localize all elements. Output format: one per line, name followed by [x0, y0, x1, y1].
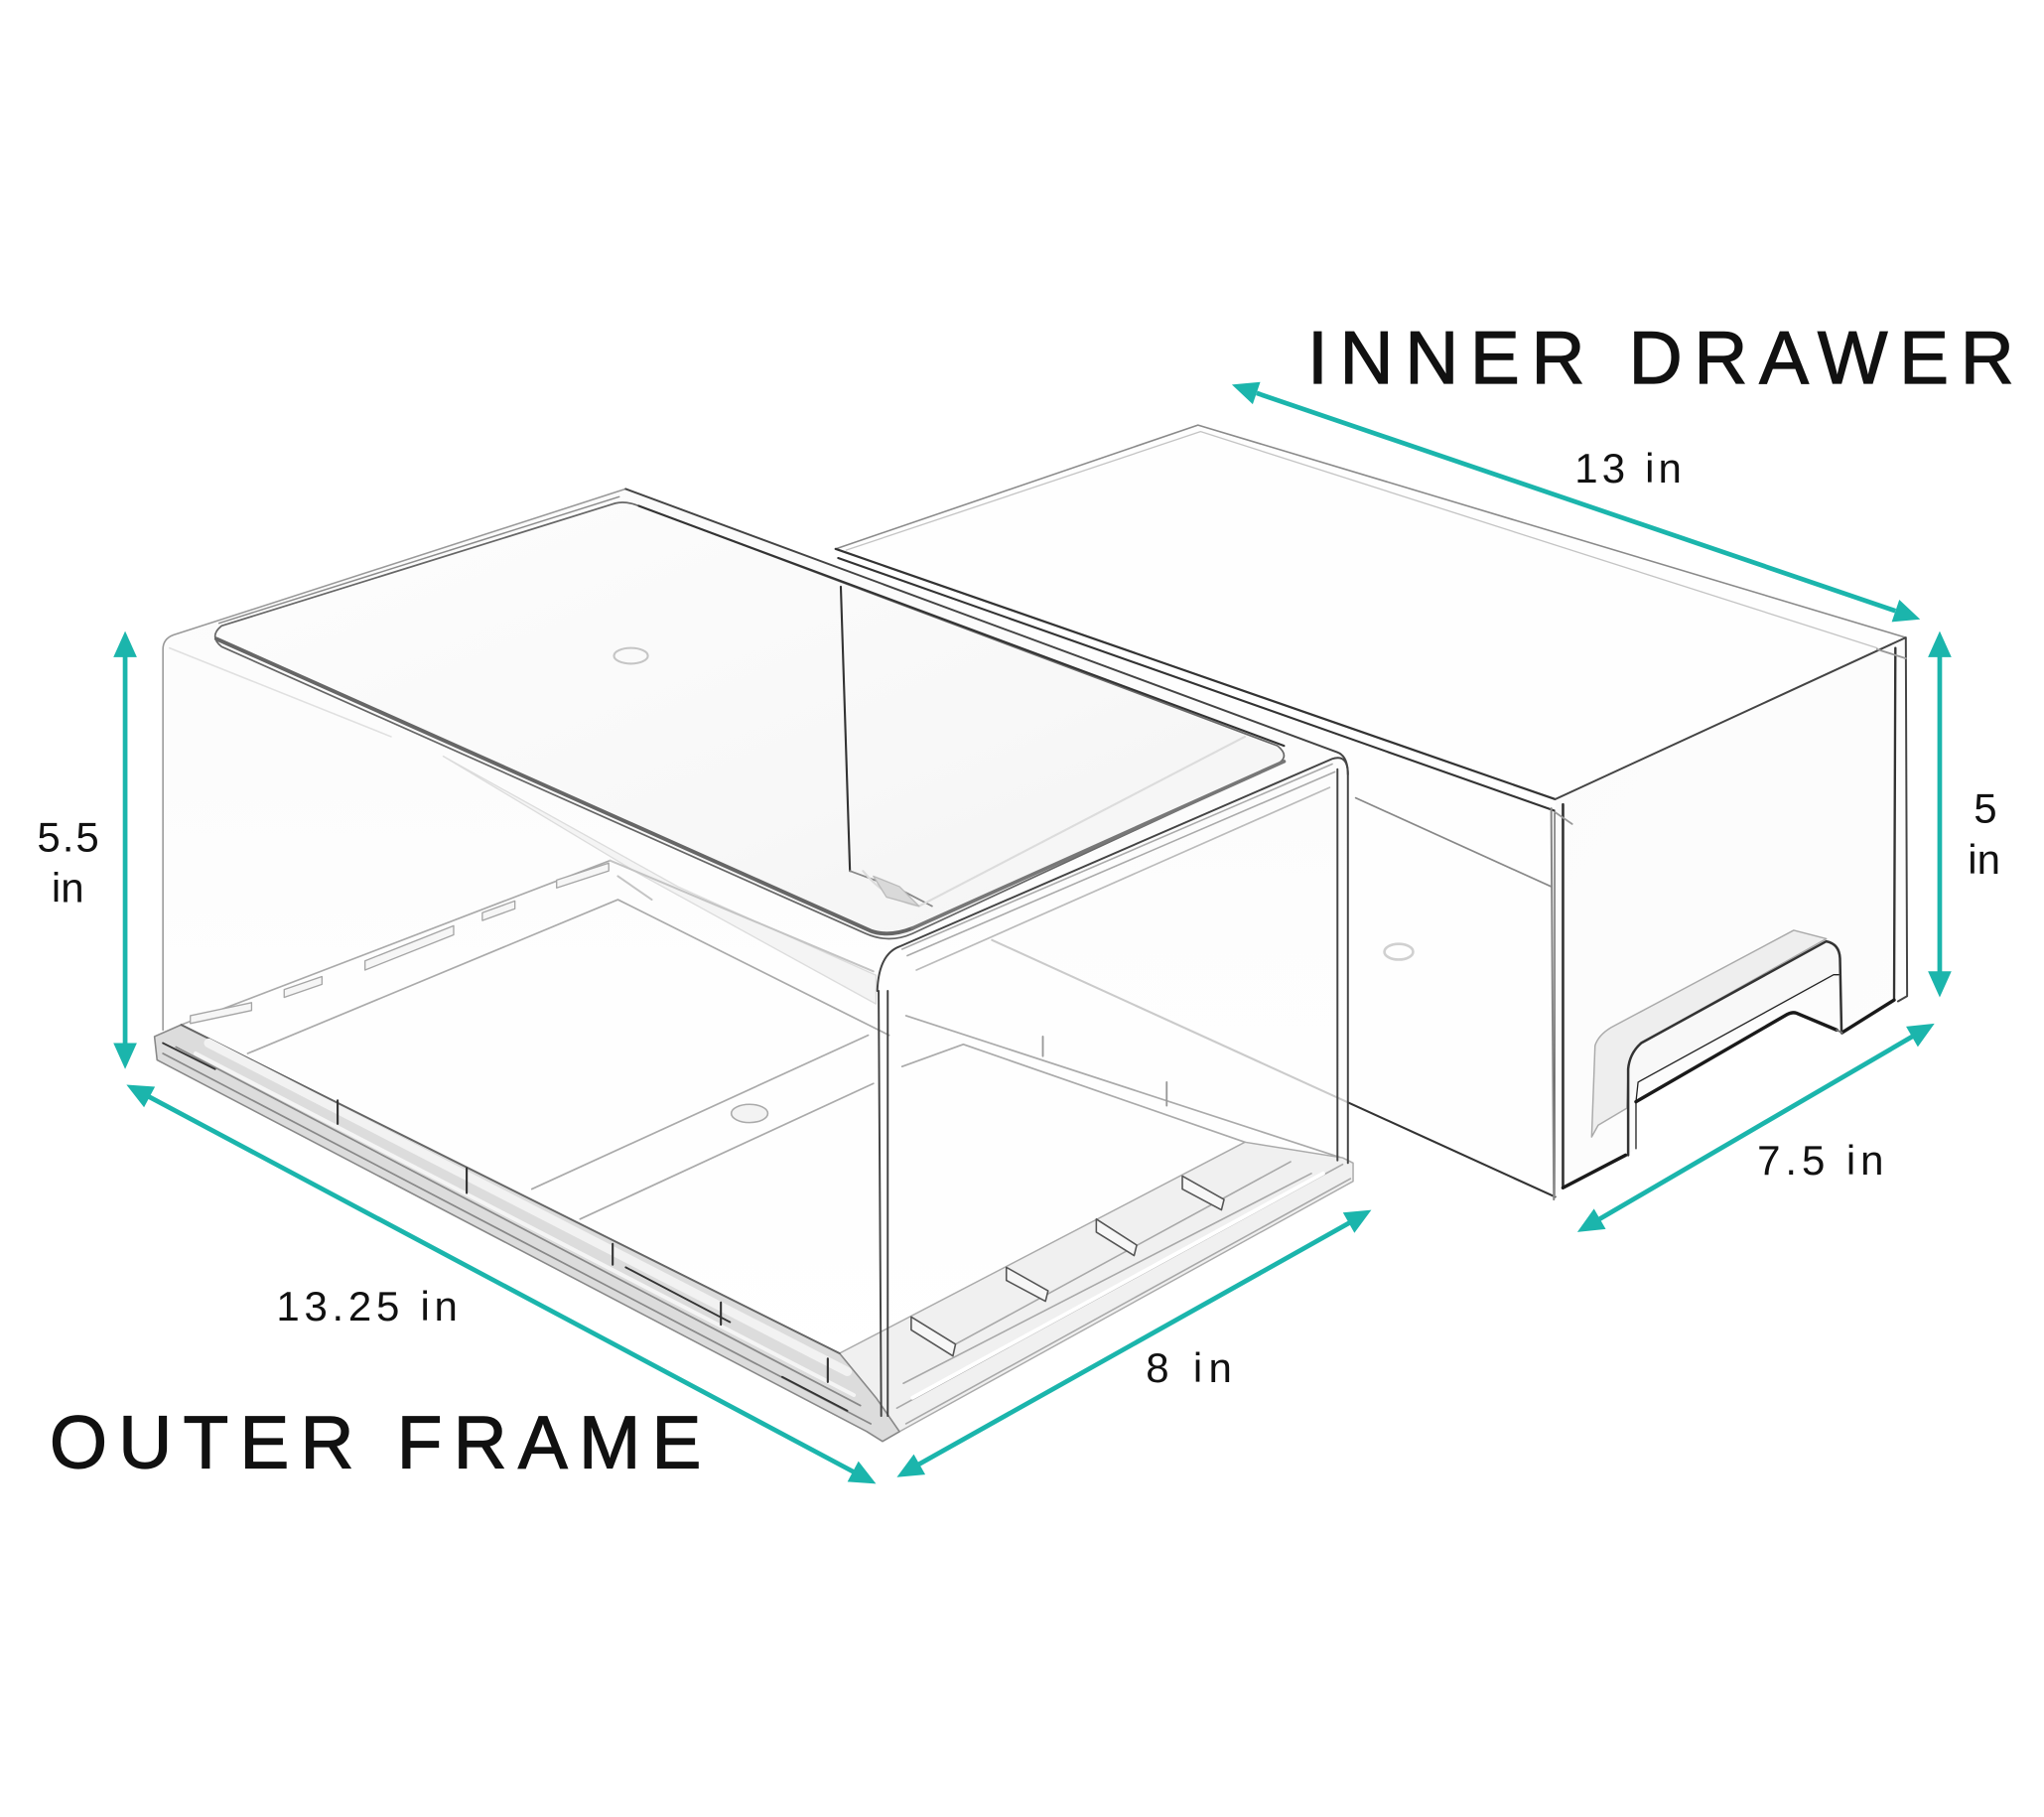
heading: inner drawer: INNER DRAWER: [1307, 316, 2014, 399]
drawer long side: [838, 558, 1556, 1196]
floor rails: [182, 861, 1341, 1219]
front ticks: [338, 1100, 828, 1382]
label: 5 in: in: [1968, 836, 2000, 883]
outer frame illustration: [155, 489, 1353, 1442]
arrow: 13.25 in length: [126, 1085, 876, 1483]
drawer floor: [1356, 798, 1893, 1000]
back-right ticks: [1043, 1037, 1166, 1106]
arrow: 13 in length: [1232, 382, 1920, 622]
drawer seen through lid: [841, 587, 850, 871]
heading: outer frame: OUTER FRAME: [50, 1401, 701, 1484]
arrow: 5 in height: [1928, 631, 1952, 998]
drawer handle: [1591, 930, 1827, 1137]
arrow: 8 in width: [896, 1210, 1371, 1477]
front rim highlight: [916, 787, 1329, 970]
label: 7.5 in: 7.5 in: [1757, 1137, 1883, 1184]
frame pillars: [878, 758, 1348, 1416]
label: 13 in: 13 in: [1574, 445, 1682, 491]
arrow: 7.5 in width: [1577, 1024, 1935, 1232]
label: 5.5 in: 5.5: [37, 813, 101, 860]
back tabs: [191, 863, 609, 1024]
right slats: [911, 1176, 1224, 1356]
left base band: [155, 1025, 899, 1442]
label: 5.5 in: in: [52, 865, 84, 911]
label: 5 in: 5: [1974, 785, 1997, 832]
label: 5.5 in: [37, 813, 101, 911]
label: 8 in: 8 in: [1146, 1344, 1232, 1391]
frame walls: [163, 489, 1348, 1416]
drawer top face: [836, 425, 1906, 799]
label: 5 in: [1968, 785, 2000, 883]
inner drawer illustration: [836, 425, 1907, 1199]
arrow: 5.5 in height: [113, 631, 137, 1069]
right base band: [840, 1142, 1353, 1442]
label: 13.25 in: 13.25 in: [276, 1283, 458, 1329]
reflection band below lid: [443, 757, 876, 1004]
lid recess: [215, 502, 1284, 938]
drawer end panel: [1556, 637, 1907, 1196]
